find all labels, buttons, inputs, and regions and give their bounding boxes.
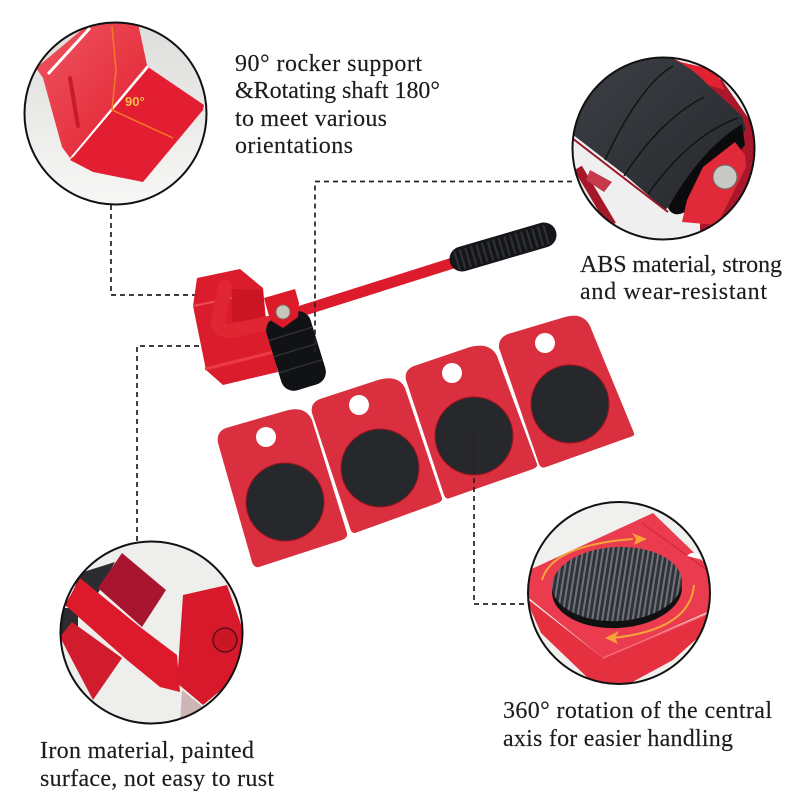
text: iron material bbox=[40, 738, 274, 792]
plate 3 bbox=[406, 346, 537, 499]
black foam grip bbox=[456, 234, 548, 261]
text: ABS material bbox=[580, 252, 782, 305]
bolt detail bbox=[713, 165, 737, 189]
90 degree label: 90° bbox=[125, 94, 145, 109]
handle bar bbox=[298, 263, 453, 312]
roller bbox=[263, 308, 329, 394]
text: 360 degree rotation: 360° rotation of the central bbox=[503, 698, 772, 724]
roller bracket bbox=[264, 289, 299, 328]
callout circle: 90 degree support bbox=[20, 20, 210, 210]
callout circle: iron material bbox=[58, 540, 248, 730]
roller bracket detail bbox=[682, 142, 746, 225]
text: 90 degree rocker support: &Rotating shaft 180° bbox=[235, 78, 440, 104]
plate 2 bbox=[312, 378, 442, 533]
callout circle: ABS roller bbox=[570, 55, 760, 245]
product: four sliding plates bbox=[218, 316, 634, 567]
plate 1 bbox=[218, 409, 347, 567]
plate 4 bbox=[499, 316, 634, 468]
text: 360 degree rotation: axis for easier handling bbox=[503, 726, 733, 752]
rotation arrow top bbox=[542, 539, 633, 580]
text: 90 degree rocker support: 90° rocker support bbox=[235, 51, 422, 77]
text: 360 degree rotation bbox=[503, 698, 772, 752]
text: ABS material: ABS material, strong bbox=[580, 252, 782, 278]
text: iron material: surface, not easy to rust bbox=[40, 766, 274, 792]
text: 90 degree rocker support: to meet various bbox=[235, 106, 387, 132]
bolt head bbox=[213, 628, 237, 652]
lifter hook bbox=[218, 287, 268, 331]
dashed connector: iron material detail to lifter bbox=[137, 346, 209, 541]
text: 90 degree rocker support: orientations bbox=[235, 133, 353, 159]
text: 90 degree rocker support bbox=[235, 51, 440, 159]
callout circle: 360 degree rotation bbox=[525, 500, 715, 690]
dashed connector: ABS roller detail to roller bbox=[315, 182, 572, 353]
lifter base plate bbox=[193, 269, 278, 385]
rubber disc bbox=[552, 584, 682, 628]
dashed connector: central axis to rotation detail bbox=[474, 433, 527, 604]
text: ABS material: and wear-resistant bbox=[580, 279, 767, 305]
bolt bbox=[276, 305, 290, 319]
text: iron material: Iron material, painted bbox=[40, 738, 254, 764]
rotation arrow bottom bbox=[612, 585, 694, 638]
product: lifter bar with roller bbox=[193, 234, 548, 394]
dashed connector: 90 degree detail to lifter bbox=[111, 205, 207, 295]
